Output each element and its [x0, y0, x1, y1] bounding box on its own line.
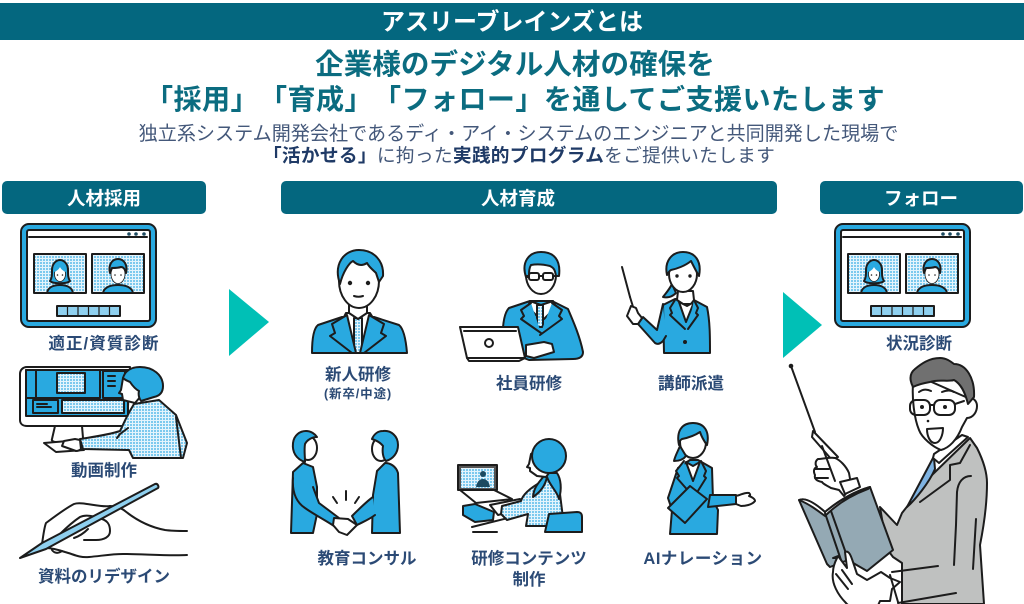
icon: employee with laptop: [460, 252, 583, 361]
panel heading: 人材採用: [2, 181, 206, 214]
panel heading: 人材採用: 人材採用: [67, 188, 141, 209]
label: 資料のリデザイン: 資料のリデザイン: [38, 566, 170, 586]
label: 新人研修: (新卒/中途): [324, 386, 392, 401]
icon: hand with pen: [20, 484, 187, 558]
label: 状況診断: 状況診断: [886, 334, 952, 353]
main heading: 「採用」「育成」「フォロー」を通してご支援いたします: [145, 83, 885, 115]
label: 適正/資質診断: 適正/資質診断: [48, 334, 160, 353]
subheading text: 独立系システム開発会社であるディ・アイ・システムのエンジニアと共同開発した現場で: [139, 123, 898, 145]
label: 新人研修: [324, 365, 392, 401]
icon: AI narration presenter: [668, 423, 755, 534]
label: AIナレーション: AIナレーション: [643, 550, 763, 568]
label: 社員研修: 社員研修: [496, 374, 562, 393]
main heading: 企業様のデジタル人材の確保を: [315, 48, 715, 81]
icon: video call monitor, follow: [835, 224, 970, 327]
subheading text: 「活かせる」に拘った実践的プログラムをご提供いたします: [263, 145, 775, 166]
icon: training content creation: [458, 439, 582, 532]
arrow: recruit to training: [229, 289, 269, 356]
icon: handshake consult: [291, 431, 400, 535]
icon: video call monitor: [21, 224, 156, 327]
label: 講師派遣: 講師派遣: [658, 374, 724, 393]
subheading text: [139, 123, 898, 166]
label: 動画制作: 動画制作: [71, 461, 138, 480]
arrow: training to follow: [783, 292, 822, 358]
panel heading: フォロー: [820, 181, 1023, 214]
title bar: アスリーブレインズとは: [381, 8, 643, 36]
panel heading: 人材育成: 人材育成: [481, 188, 555, 209]
icon: new employee: [312, 250, 407, 353]
icon: lecturer with pointer: [622, 252, 710, 353]
label: 新人研修: 新人研修: [325, 365, 392, 384]
title bar: [0, 3, 1024, 40]
icon: lecturer with book: [789, 358, 987, 604]
panel heading: 人材育成: [281, 181, 777, 214]
label: 研修コンテンツ制作: 制作: [512, 570, 546, 589]
label: 教育コンサル: 教育コンサル: [318, 549, 416, 568]
main heading: [145, 48, 885, 115]
label: 研修コンテンツ制作: [471, 549, 587, 589]
icon: video editing: [20, 367, 187, 458]
panel heading: フォロー: フォロー: [884, 188, 958, 209]
label: 研修コンテンツ制作: 研修コンテンツ: [471, 549, 587, 568]
